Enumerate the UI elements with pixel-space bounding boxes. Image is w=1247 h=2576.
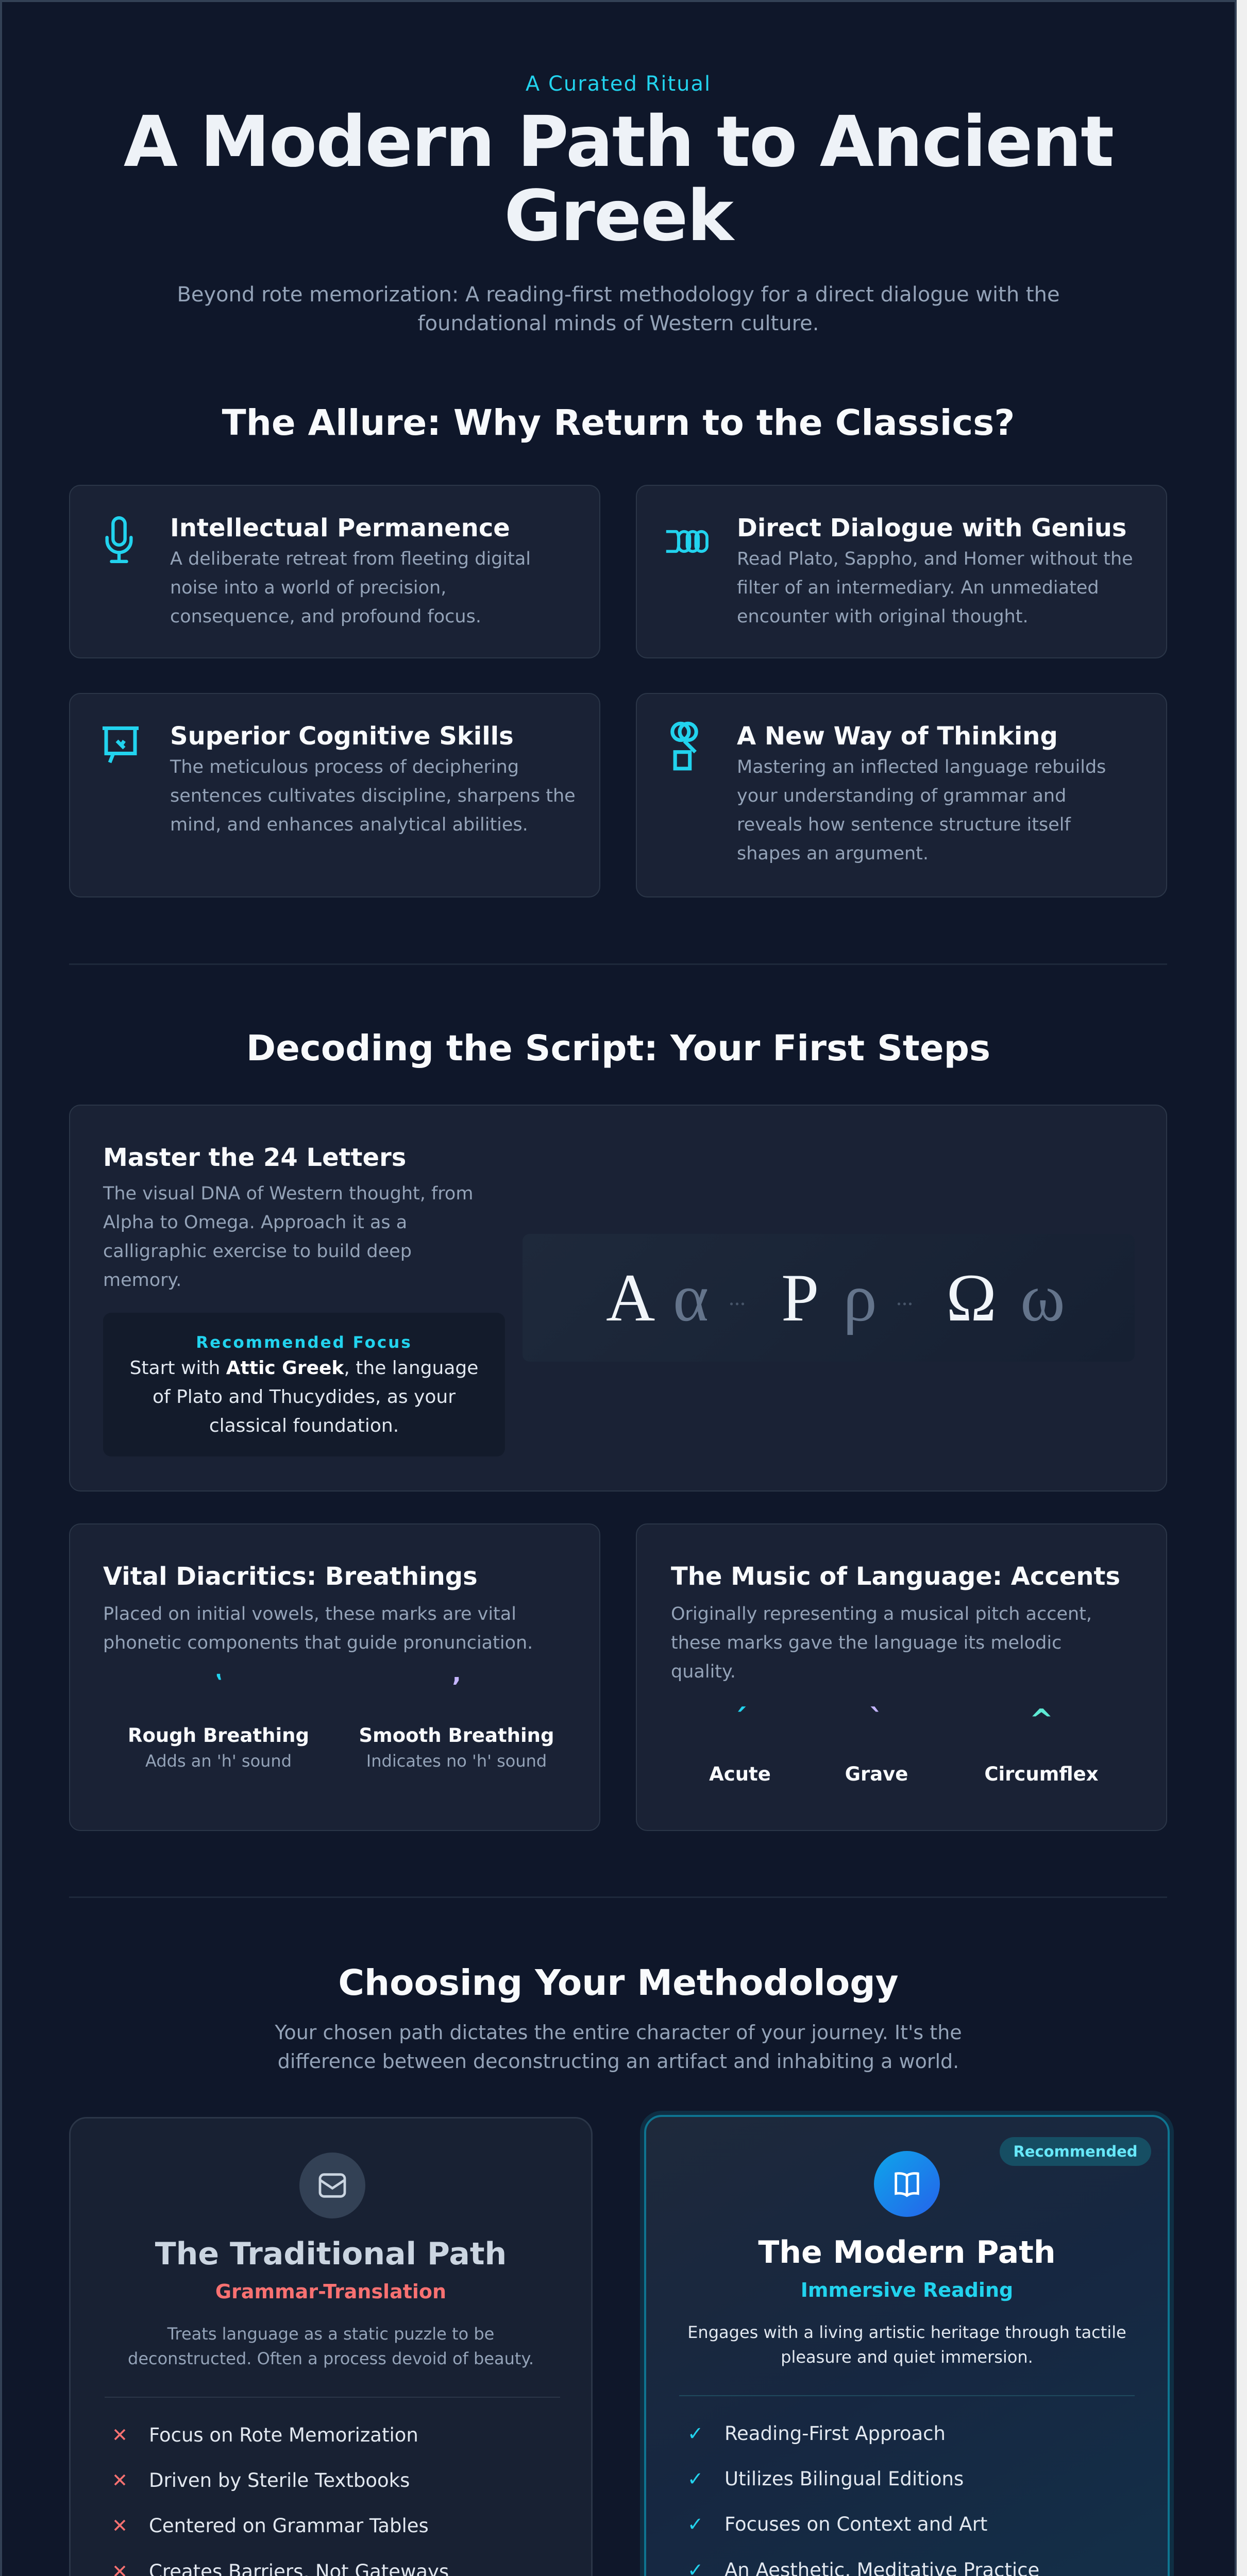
eyebrow: A Curated Ritual (526, 72, 711, 96)
title: Greek (504, 176, 733, 257)
list: traditional: Centered on Grammar Tables (149, 2515, 429, 2537)
title: The Traditional Path (155, 2236, 507, 2272)
smooth breathing: Indicates no 'h' sound (366, 1751, 547, 1771)
smooth breathing: Smooth Breathing (359, 1724, 554, 1747)
card: accents (636, 1523, 1167, 1831)
letters display: ... (729, 1285, 746, 1310)
title: Direct Dialogue with Genius (737, 514, 1126, 543)
text: Originally representing a musical pitch accent, these marks gave the language its melodic quality. (671, 1604, 1092, 1682)
title (124, 101, 1113, 257)
heading: allure: The Allure: Why Return to the Classics? (222, 402, 1015, 444)
text: The meticulous process of deciphering sentences cultivates discipline, sharpens the mind, and enhances analytical abilities. (170, 757, 576, 835)
badge: recommended: Recommended (1013, 2143, 1138, 2160)
list: modern: Focuses on Context and Art (724, 2513, 987, 2535)
subtitle: Immersive Reading (801, 2279, 1013, 2301)
acute (709, 1703, 771, 1785)
title: The Modern Path (758, 2234, 1056, 2270)
title: Intellectual Permanence (170, 514, 510, 543)
title: A New Way of Thinking (737, 722, 1058, 751)
card: breathings (69, 1523, 600, 1831)
letters display: Ρ (781, 1260, 819, 1335)
letters display: ω (1020, 1260, 1065, 1335)
icon: microphone (105, 516, 133, 563)
acute: Acute (709, 1763, 771, 1785)
text: Mastering an inflected language rebuilds your understanding of grammar and reveals how sentence structure itself shapes an argument. (737, 757, 1106, 864)
text: Placed on initial vowels, these marks are vital phonetic components that guide pronunciation. (103, 1604, 533, 1653)
letters display: Α (606, 1260, 655, 1335)
heading: methodology: Choosing Your Methodology (338, 1962, 899, 2004)
rough breathing: Rough Breathing (128, 1724, 309, 1747)
list: traditional: Focus on Rote Memorization (149, 2424, 418, 2446)
callout: recommended focus (103, 1313, 505, 1456)
heading: decoding: Decoding the Script: Your First Steps (246, 1028, 990, 1069)
letters display: ... (896, 1285, 913, 1310)
rough breathing: Adds an 'h' sound (145, 1751, 292, 1771)
list: modern: Utilizes Bilingual Editions (724, 2468, 964, 2490)
list: modern: ✓ (687, 2513, 703, 2535)
icon: open book (874, 2151, 940, 2217)
text: A deliberate retreat from fleeting digital noise into a world of precision, consequence, and profound focus. (170, 549, 531, 627)
card: new way of thinking (636, 693, 1167, 897)
subtitle: Grammar-Translation (215, 2280, 446, 2303)
subtitle: Beyond rote memorization: A reading-first methodology for a direct dialogue with the foundational minds of Western culture. (177, 283, 1060, 335)
circumflex: Circumflex (984, 1763, 1099, 1785)
subtitle: methodology: Your chosen path dictates the entire character of your journey. It's the difference between deconstructing an artifact and inhabiting a world. (275, 2021, 962, 2073)
grave: Grave (845, 1763, 908, 1785)
badge: recommended (1000, 2137, 1151, 2166)
list: modern: ✓ (687, 2422, 703, 2445)
letters display: α (673, 1260, 709, 1335)
callout: recommended focus: Recommended Focus (196, 1333, 412, 1352)
list: traditional: ✕ (112, 2515, 128, 2537)
list: modern: ✓ (687, 2468, 703, 2490)
list: traditional (112, 2424, 449, 2576)
list: traditional: Driven by Sterile Textbooks (149, 2469, 410, 2492)
card: master the 24 letters (69, 1105, 1167, 1492)
circumflex: ^ (1030, 1703, 1053, 1737)
smooth breathing: ’ (452, 1672, 461, 1701)
rough breathing (128, 1672, 309, 1771)
icon: board (103, 726, 139, 764)
title: Superior Cognitive Skills (170, 722, 514, 751)
description: Engages with a living artistic heritage through tactile pleasure and quiet immersion. (687, 2323, 1126, 2367)
rough breathing: ʽ (214, 1672, 223, 1701)
grave (845, 1703, 908, 1785)
title: The Music of Language: Accents (671, 1562, 1120, 1591)
title: Vital Diacritics: Breathings (103, 1562, 478, 1591)
icon: person (670, 721, 698, 771)
circumflex (984, 1703, 1099, 1785)
letters display (523, 1234, 1135, 1362)
card: cognitive skills (69, 693, 600, 897)
smooth breathing (359, 1672, 554, 1771)
list: modern (687, 2422, 1039, 2576)
list: traditional: ✕ (112, 2424, 128, 2446)
title: Master the 24 Letters (103, 1143, 406, 1172)
card: intellectual permanence (69, 485, 600, 658)
letters display: ρ (843, 1260, 877, 1335)
acute: ´ (733, 1703, 747, 1737)
description: Treats language as a static puzzle to be deconstructed. Often a process devoid of beauty. (128, 2324, 534, 2368)
callout: recommended focus: Start with Attic Greek, the language of Plato and Thucydides, as your classical foundation. (130, 1358, 478, 1436)
text: Read Plato, Sappho, and Homer without the filter of an intermediary. An unmediated encounter with original thought. (737, 549, 1133, 627)
icon: envelope (299, 2153, 365, 2218)
panel: traditional path (69, 2117, 593, 2576)
title: A Modern Path to Ancient (124, 101, 1113, 183)
letters display: Ω (946, 1260, 997, 1335)
panel: modern path (644, 2115, 1170, 2576)
card: direct dialogue (636, 485, 1167, 658)
icon: links (666, 530, 709, 553)
list: modern: Reading-First Approach (724, 2422, 946, 2445)
text: The visual DNA of Western thought, from Alpha to Omega. Approach it as a calligraphic exercise to build deep memory. (103, 1183, 473, 1291)
list: traditional: ✕ (112, 2469, 128, 2492)
grave: ` (869, 1703, 884, 1737)
